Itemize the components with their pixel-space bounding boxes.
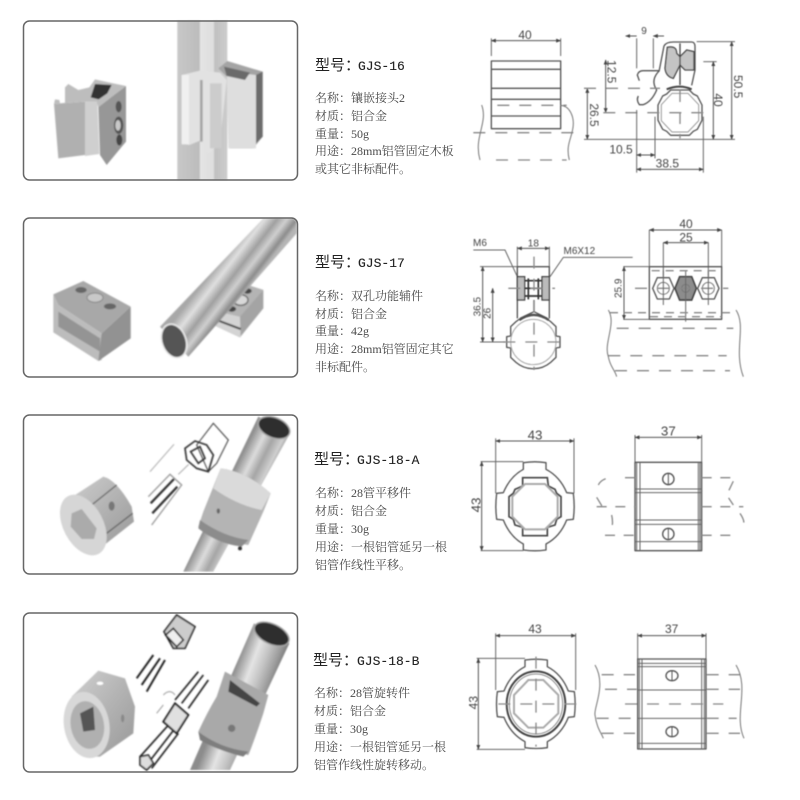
photo: clip and column xyxy=(54,21,263,180)
photo: sleeve, exploded view and tube xyxy=(50,412,293,572)
technical drawing: GJS-17: M6 xyxy=(473,238,487,249)
panel: GJS-18-B photo xyxy=(24,613,298,772)
heading: GJS-16: GJS-16 xyxy=(358,59,405,74)
heading: GJS-17 xyxy=(315,254,405,271)
text block: GJS-18-B specs: 用途：一根铝管延另一根 xyxy=(314,739,446,754)
text block: GJS-18-B specs: 铝管作线性旋转移动。 xyxy=(314,757,434,772)
technical drawing: GJS-17: 26 xyxy=(483,307,494,319)
technical drawing: GJS-16: 40 xyxy=(711,93,725,107)
text block: GJS-18-B specs xyxy=(314,685,446,772)
text block: GJS-18-A specs: 铝管作线性平移。 xyxy=(315,557,411,572)
text block: GJS-17 specs: 名称：双孔功能辅件 xyxy=(315,288,423,303)
technical drawing: GJS-16: 40 xyxy=(518,28,532,42)
panel frame xyxy=(24,21,298,180)
heading: GJS-18-B: 型号： xyxy=(313,652,358,669)
text block: GJS-18-A specs: 材质：铝合金 xyxy=(315,503,387,518)
heading: GJS-18-A xyxy=(314,451,420,468)
text block: GJS-18-A specs: 用途：一根铝管延另一根 xyxy=(315,539,447,554)
heading: GJS-18-A: GJS-18-A xyxy=(357,453,420,468)
panel: GJS-18-A photo xyxy=(24,412,298,574)
text block: GJS-18-A specs: 名称：28管平移件 xyxy=(315,485,411,500)
panel: GJS-17 photo xyxy=(24,218,298,377)
technical drawing: GJS-17: 18 xyxy=(528,239,539,250)
technical drawing: GJS-17: 25 xyxy=(679,231,693,245)
text block: GJS-17 specs: 重量：42g xyxy=(315,323,369,338)
text block: GJS-16 specs: 名称：镶嵌接头2 xyxy=(315,90,405,105)
heading: GJS-18-B: GJS-18-B xyxy=(357,654,420,669)
text block: GJS-18-B specs: 重量：30g xyxy=(314,721,368,736)
text block: GJS-17 specs: 非标配件。 xyxy=(315,359,375,374)
panel frame xyxy=(24,613,298,772)
heading: GJS-16: 型号： xyxy=(315,57,360,74)
technical drawing: GJS-18-B: 43 xyxy=(528,622,542,636)
heading: GJS-17: 型号： xyxy=(315,254,360,271)
technical drawing: GJS-17: M6X12 xyxy=(564,246,596,257)
technical drawing: GJS-18-B xyxy=(467,622,744,749)
technical drawing: GJS-17: 25.9 xyxy=(613,278,624,298)
text block: GJS-16 specs: 用途：28mm铝管固定木板 xyxy=(315,143,454,158)
text block: GJS-16 specs: 或其它非标配件。 xyxy=(315,161,411,176)
technical drawing: GJS-18-B: 43 xyxy=(467,696,481,709)
photo: rotary sleeve, exploded view and tube xyxy=(59,615,293,770)
panel frame xyxy=(24,415,298,574)
text block: GJS-17 specs: 用途：28mm铝管固定其它 xyxy=(315,341,454,356)
technical drawing: GJS-18-A xyxy=(469,423,744,551)
technical drawing: GJS-16: 38.5 xyxy=(656,156,679,170)
technical drawing: GJS-16 xyxy=(473,26,745,173)
text block: GJS-17 specs xyxy=(315,288,454,374)
technical drawing: GJS-18-A: 43 xyxy=(469,498,484,512)
technical drawing: GJS-18-A: 37 xyxy=(661,423,676,438)
technical drawing: GJS-16: 10.5 xyxy=(609,142,633,156)
text block: GJS-18-A specs: 重量：30g xyxy=(315,521,369,536)
technical drawing: GJS-16: 50.5 xyxy=(731,75,745,99)
text block: GJS-17 specs: 材质：铝合金 xyxy=(315,306,387,321)
technical drawing: GJS-16: 12.5 xyxy=(605,60,619,84)
technical drawing: GJS-17: 40 xyxy=(679,217,693,231)
photo: block and tube xyxy=(53,218,297,361)
technical drawing: GJS-18-B: 37 xyxy=(665,622,679,636)
technical drawing: GJS-16: 26.5 xyxy=(587,103,601,127)
technical drawing: GJS-18-A: 43 xyxy=(528,427,542,442)
text block: GJS-16 specs: 材质：铝合金 xyxy=(315,108,387,123)
panel: GJS-16 photo xyxy=(24,21,298,180)
text block: GJS-18-B specs: 材质：铝合金 xyxy=(314,703,386,718)
text block: GJS-18-B specs: 名称：28管旋转件 xyxy=(314,685,410,700)
panel frame xyxy=(24,218,298,377)
heading: GJS-18-B xyxy=(313,652,420,669)
technical drawing: GJS-17 xyxy=(473,217,743,377)
technical drawing: GJS-17: 36.5 xyxy=(473,297,484,316)
text block: GJS-18-A specs xyxy=(315,485,447,572)
text block: GJS-16 specs: 重量：50g xyxy=(315,126,369,141)
technical drawing: GJS-16: 9 xyxy=(641,26,647,37)
heading: GJS-16 xyxy=(315,57,405,74)
text block: GJS-16 specs xyxy=(315,90,454,176)
heading: GJS-17: GJS-17 xyxy=(358,256,405,271)
heading: GJS-18-A: 型号： xyxy=(314,451,359,468)
